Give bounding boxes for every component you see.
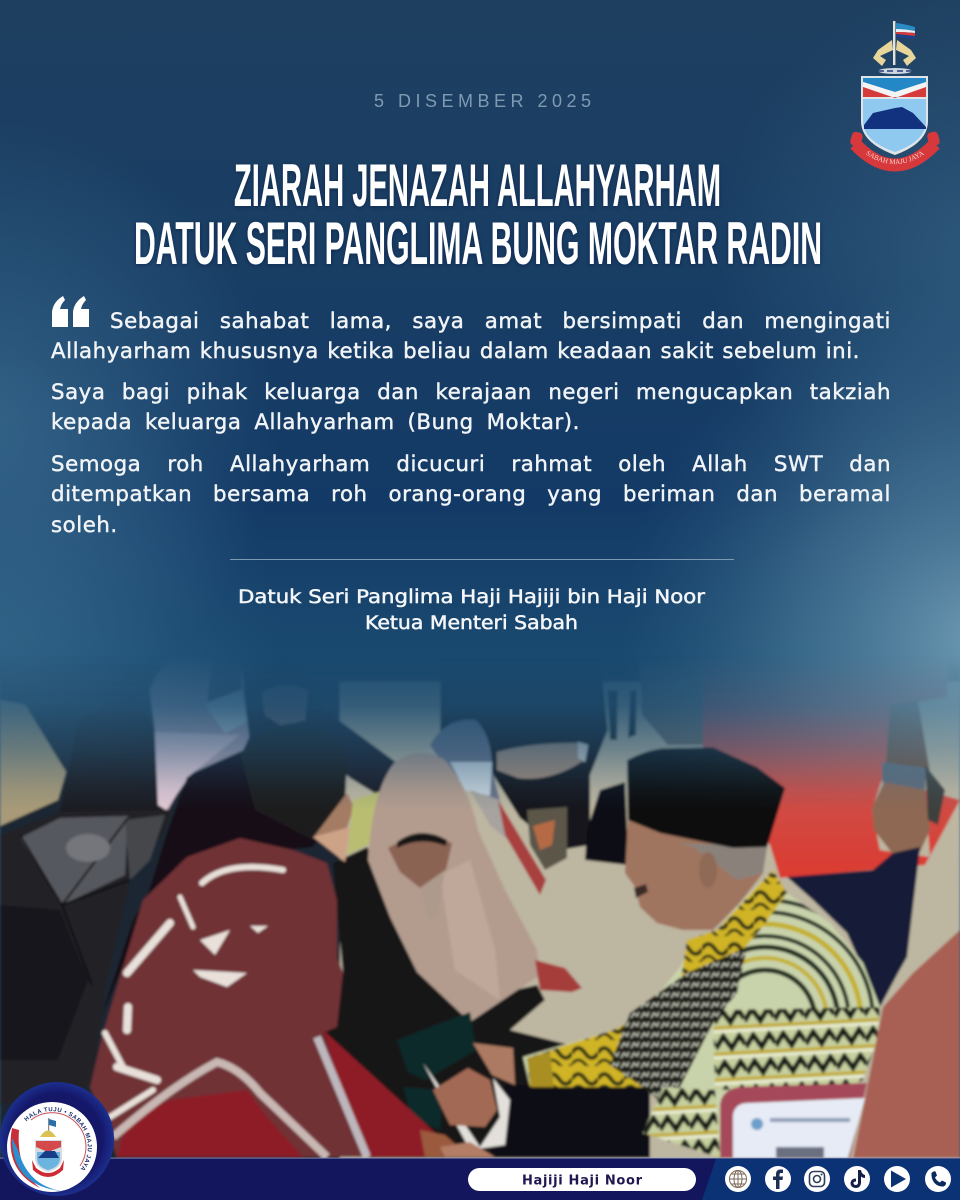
floor <box>340 682 960 1160</box>
logo badge: Hala Tuju Sabah Maju Jaya <box>0 1082 114 1196</box>
bottom bar <box>0 1158 960 1200</box>
attribution <box>238 587 705 634</box>
quote text block: kepada keluarga Allahyarham (Bung Moktar). <box>51 410 580 435</box>
beige-hijab woman's black dress <box>326 846 566 1158</box>
woman in maroon patterned hijab <box>90 838 470 1157</box>
icon: instagram <box>804 1166 830 1192</box>
man in batik shirt and black songkok <box>523 747 897 1158</box>
motto scroll <box>855 144 935 165</box>
name pill: Hajiji Haji Noor <box>522 1174 643 1188</box>
quote text block: Allahyarham khususnya ketika beliau dalam keadaan sakit sebelum ini. <box>51 339 860 364</box>
quote text block: Sebagai sahabat lama, saya amat bersimpati dan mengingati <box>110 309 891 334</box>
flag <box>893 21 895 65</box>
clasped hands <box>423 1043 515 1157</box>
woman with pale veil in back <box>60 674 251 812</box>
icon: phone <box>925 1166 951 1192</box>
sleeves and cuffs <box>397 1012 476 1130</box>
divider <box>230 559 734 560</box>
emblem: Sabah coat of arms <box>850 21 940 172</box>
title <box>134 152 822 277</box>
attribution: Ketua Menteri Sabah <box>365 613 578 634</box>
bag on the left <box>0 700 66 826</box>
icon: quotation mark <box>52 296 89 327</box>
wreath <box>878 68 912 74</box>
leather sofa <box>0 810 172 1105</box>
back wall and left shadow <box>0 640 960 1160</box>
woman in black behind <box>244 685 396 794</box>
photo: visit scene <box>0 640 960 1160</box>
icon: facebook <box>765 1166 791 1192</box>
salmon arm foreground <box>853 930 960 1158</box>
icon: youtube play <box>884 1166 910 1192</box>
icon: tiktok <box>844 1166 870 1192</box>
quote text block <box>50 309 891 538</box>
logo badge: Hala Tuju Sabah Maju Jaya: HALA TUJU • SABAH MAJU JAYA <box>24 1107 92 1170</box>
quote text block: Semoga roh Allahyarham dicucuri rahmat oleh Allah SWT dan <box>51 452 891 477</box>
attribution: Datuk Seri Panglima Haji Hajiji bin Haji Noor <box>238 587 705 608</box>
icon: website globe <box>725 1166 751 1192</box>
name pill <box>468 1168 696 1191</box>
quote text block: ditempatkan bersama roh orang-orang yang beriman dan beramal <box>51 482 891 507</box>
standing man in red shirt <box>640 640 960 1007</box>
arms <box>873 40 893 66</box>
shield <box>861 76 928 155</box>
woman in grey hijab and mask <box>430 720 546 895</box>
emblem: Sabah coat of arms: SABAH MAJU JAYA <box>866 151 924 164</box>
quote text block: Saya bagi pihak keluarga dan kerajaan negeri mengucapkan takziah <box>51 380 891 405</box>
quote text block: soleh. <box>51 513 118 538</box>
black trousers of man <box>490 1085 650 1158</box>
woman in black hijab <box>100 723 385 1020</box>
phone in foreground <box>720 1083 867 1158</box>
date: 5 DISEMBER 2025 <box>374 91 596 111</box>
woman in beige hijab <box>368 753 582 1022</box>
rear seated figure in black <box>439 682 637 871</box>
